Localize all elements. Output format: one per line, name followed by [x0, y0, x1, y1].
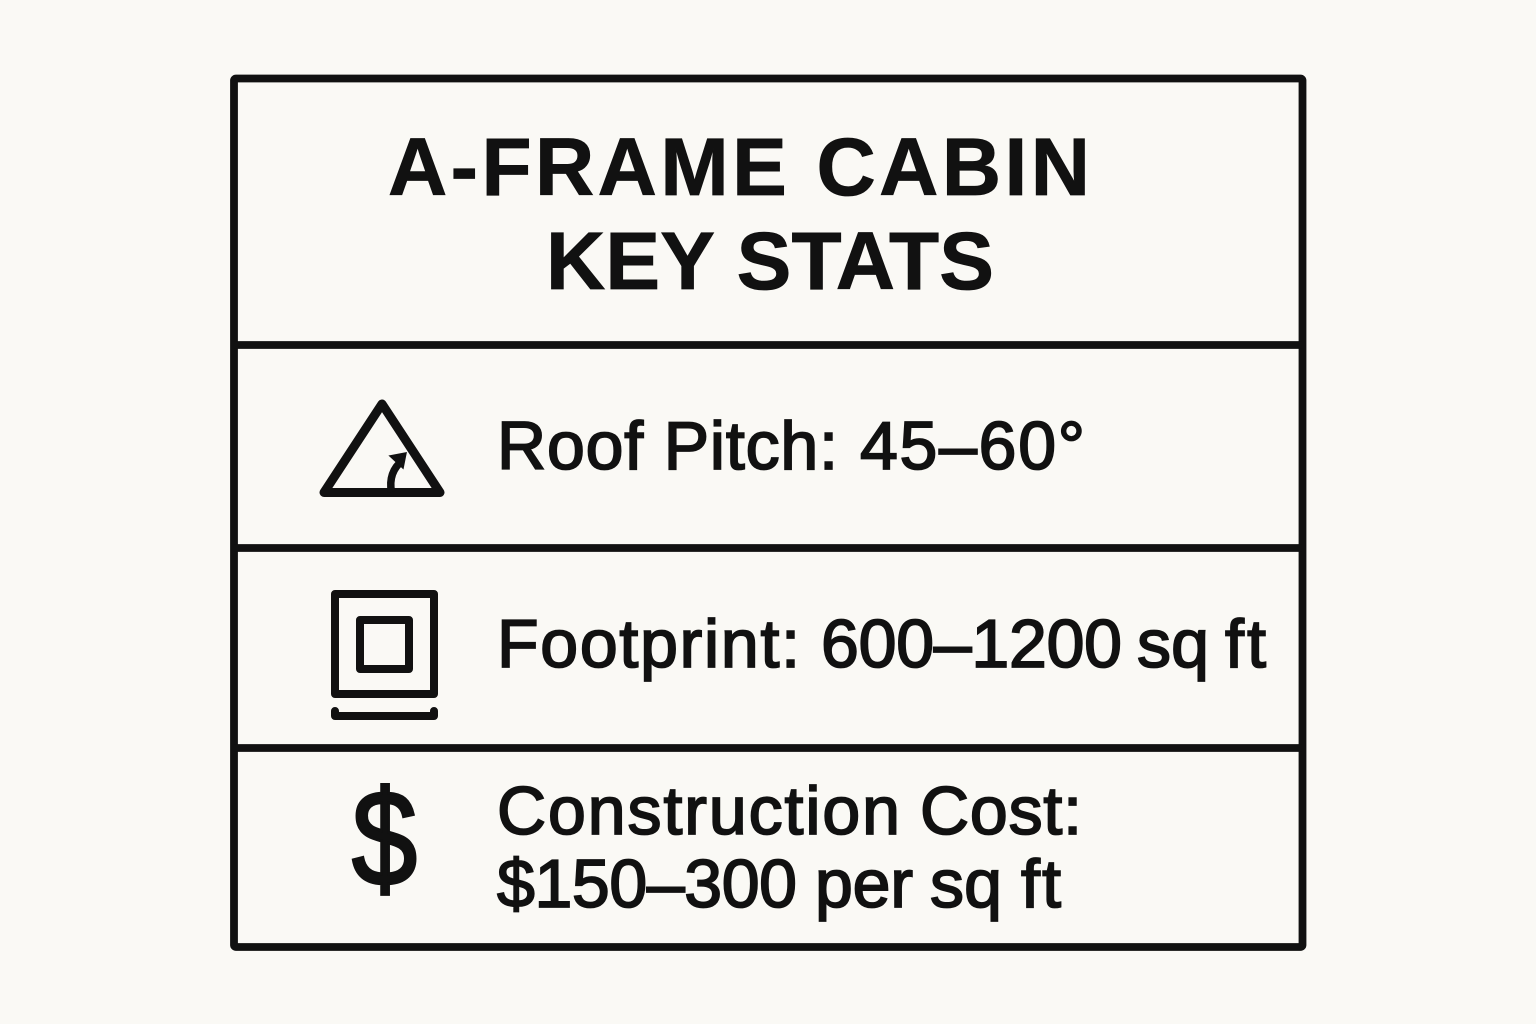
construction cost text: per — [815, 846, 913, 922]
row: footprint — [335, 594, 1266, 716]
construction cost text — [497, 773, 1082, 922]
icon: dollar sign: $ — [352, 762, 417, 914]
footprint text: Footprint: — [497, 606, 800, 682]
row: construction cost — [352, 762, 1082, 922]
title: A-FRAME CABIN — [388, 122, 1090, 213]
footprint text — [497, 606, 1266, 682]
footprint text: ft — [1225, 606, 1266, 682]
row: roof pitch — [324, 404, 1085, 492]
stats table frame — [234, 78, 1302, 947]
construction cost text: Construction — [497, 773, 900, 849]
roof pitch text: 45–60° — [860, 408, 1085, 484]
icon: nested squares floor plan — [335, 594, 434, 716]
roof pitch text: Roof Pitch: — [497, 408, 838, 484]
construction cost text: sq — [930, 846, 1002, 922]
footprint text: 600–1200 — [821, 606, 1122, 682]
footprint text: sq — [1137, 606, 1209, 682]
icon: triangle with angle arrow — [324, 404, 440, 492]
construction cost text: ft — [1021, 846, 1061, 922]
title: KEY STATS — [546, 216, 994, 307]
roof pitch text — [497, 408, 1085, 484]
construction cost text: $150–300 — [497, 846, 797, 922]
title — [388, 122, 1090, 307]
construction cost text: Cost: — [920, 773, 1082, 849]
